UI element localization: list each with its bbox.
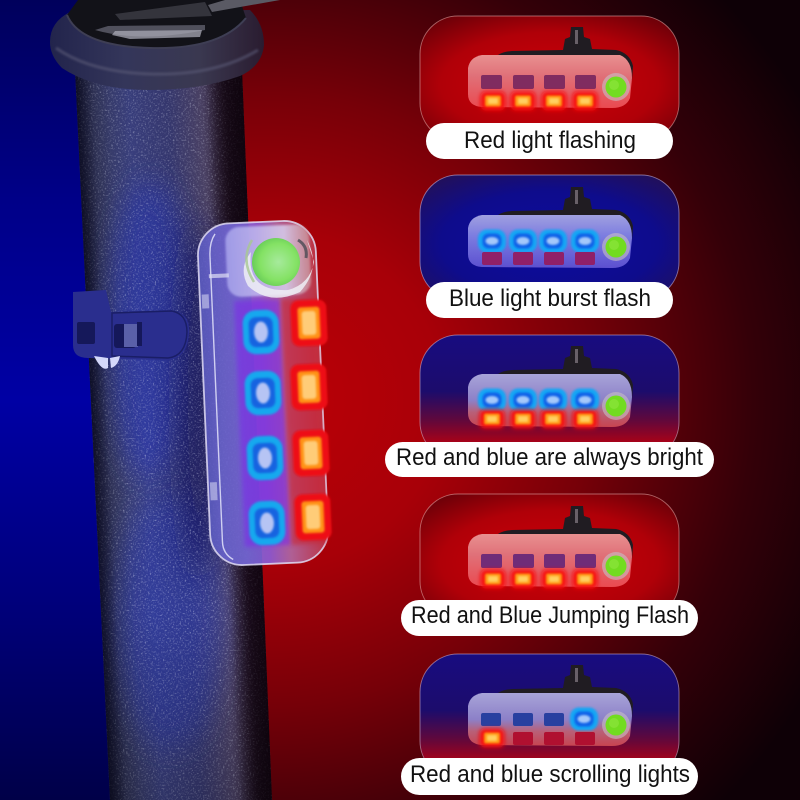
power button	[244, 238, 314, 298]
device: red lit	[468, 27, 633, 110]
light housing	[197, 220, 329, 566]
label pill	[426, 282, 673, 318]
blue LED column	[242, 309, 286, 546]
panel: blue light burst flash	[420, 175, 679, 318]
label pill	[426, 123, 673, 159]
red LED column	[290, 299, 332, 541]
main tail light	[197, 220, 332, 566]
device: blue lit	[468, 187, 633, 268]
device: red phase	[468, 506, 633, 588]
seat clamp collar	[50, 0, 280, 90]
label pill: Red and blue scrolling lights	[410, 761, 690, 788]
mounting strap	[73, 290, 189, 369]
panel: red light flashing	[420, 16, 679, 159]
label pill	[401, 758, 698, 795]
seat tube	[75, 74, 272, 800]
panel: red and blue scrolling lights	[401, 654, 698, 795]
label pill: Blue light burst flash	[449, 285, 651, 312]
panel: red and blue are always bright	[385, 335, 714, 477]
label pill: Red light flashing	[464, 127, 636, 154]
label pill	[401, 600, 698, 636]
device: both lit	[468, 346, 633, 428]
label pill: Red and blue are always bright	[396, 444, 703, 471]
label pill: Red and Blue Jumping Flash	[411, 602, 689, 629]
device: scrolling phase	[468, 665, 633, 748]
panel: red and blue jumping flash	[401, 494, 698, 636]
